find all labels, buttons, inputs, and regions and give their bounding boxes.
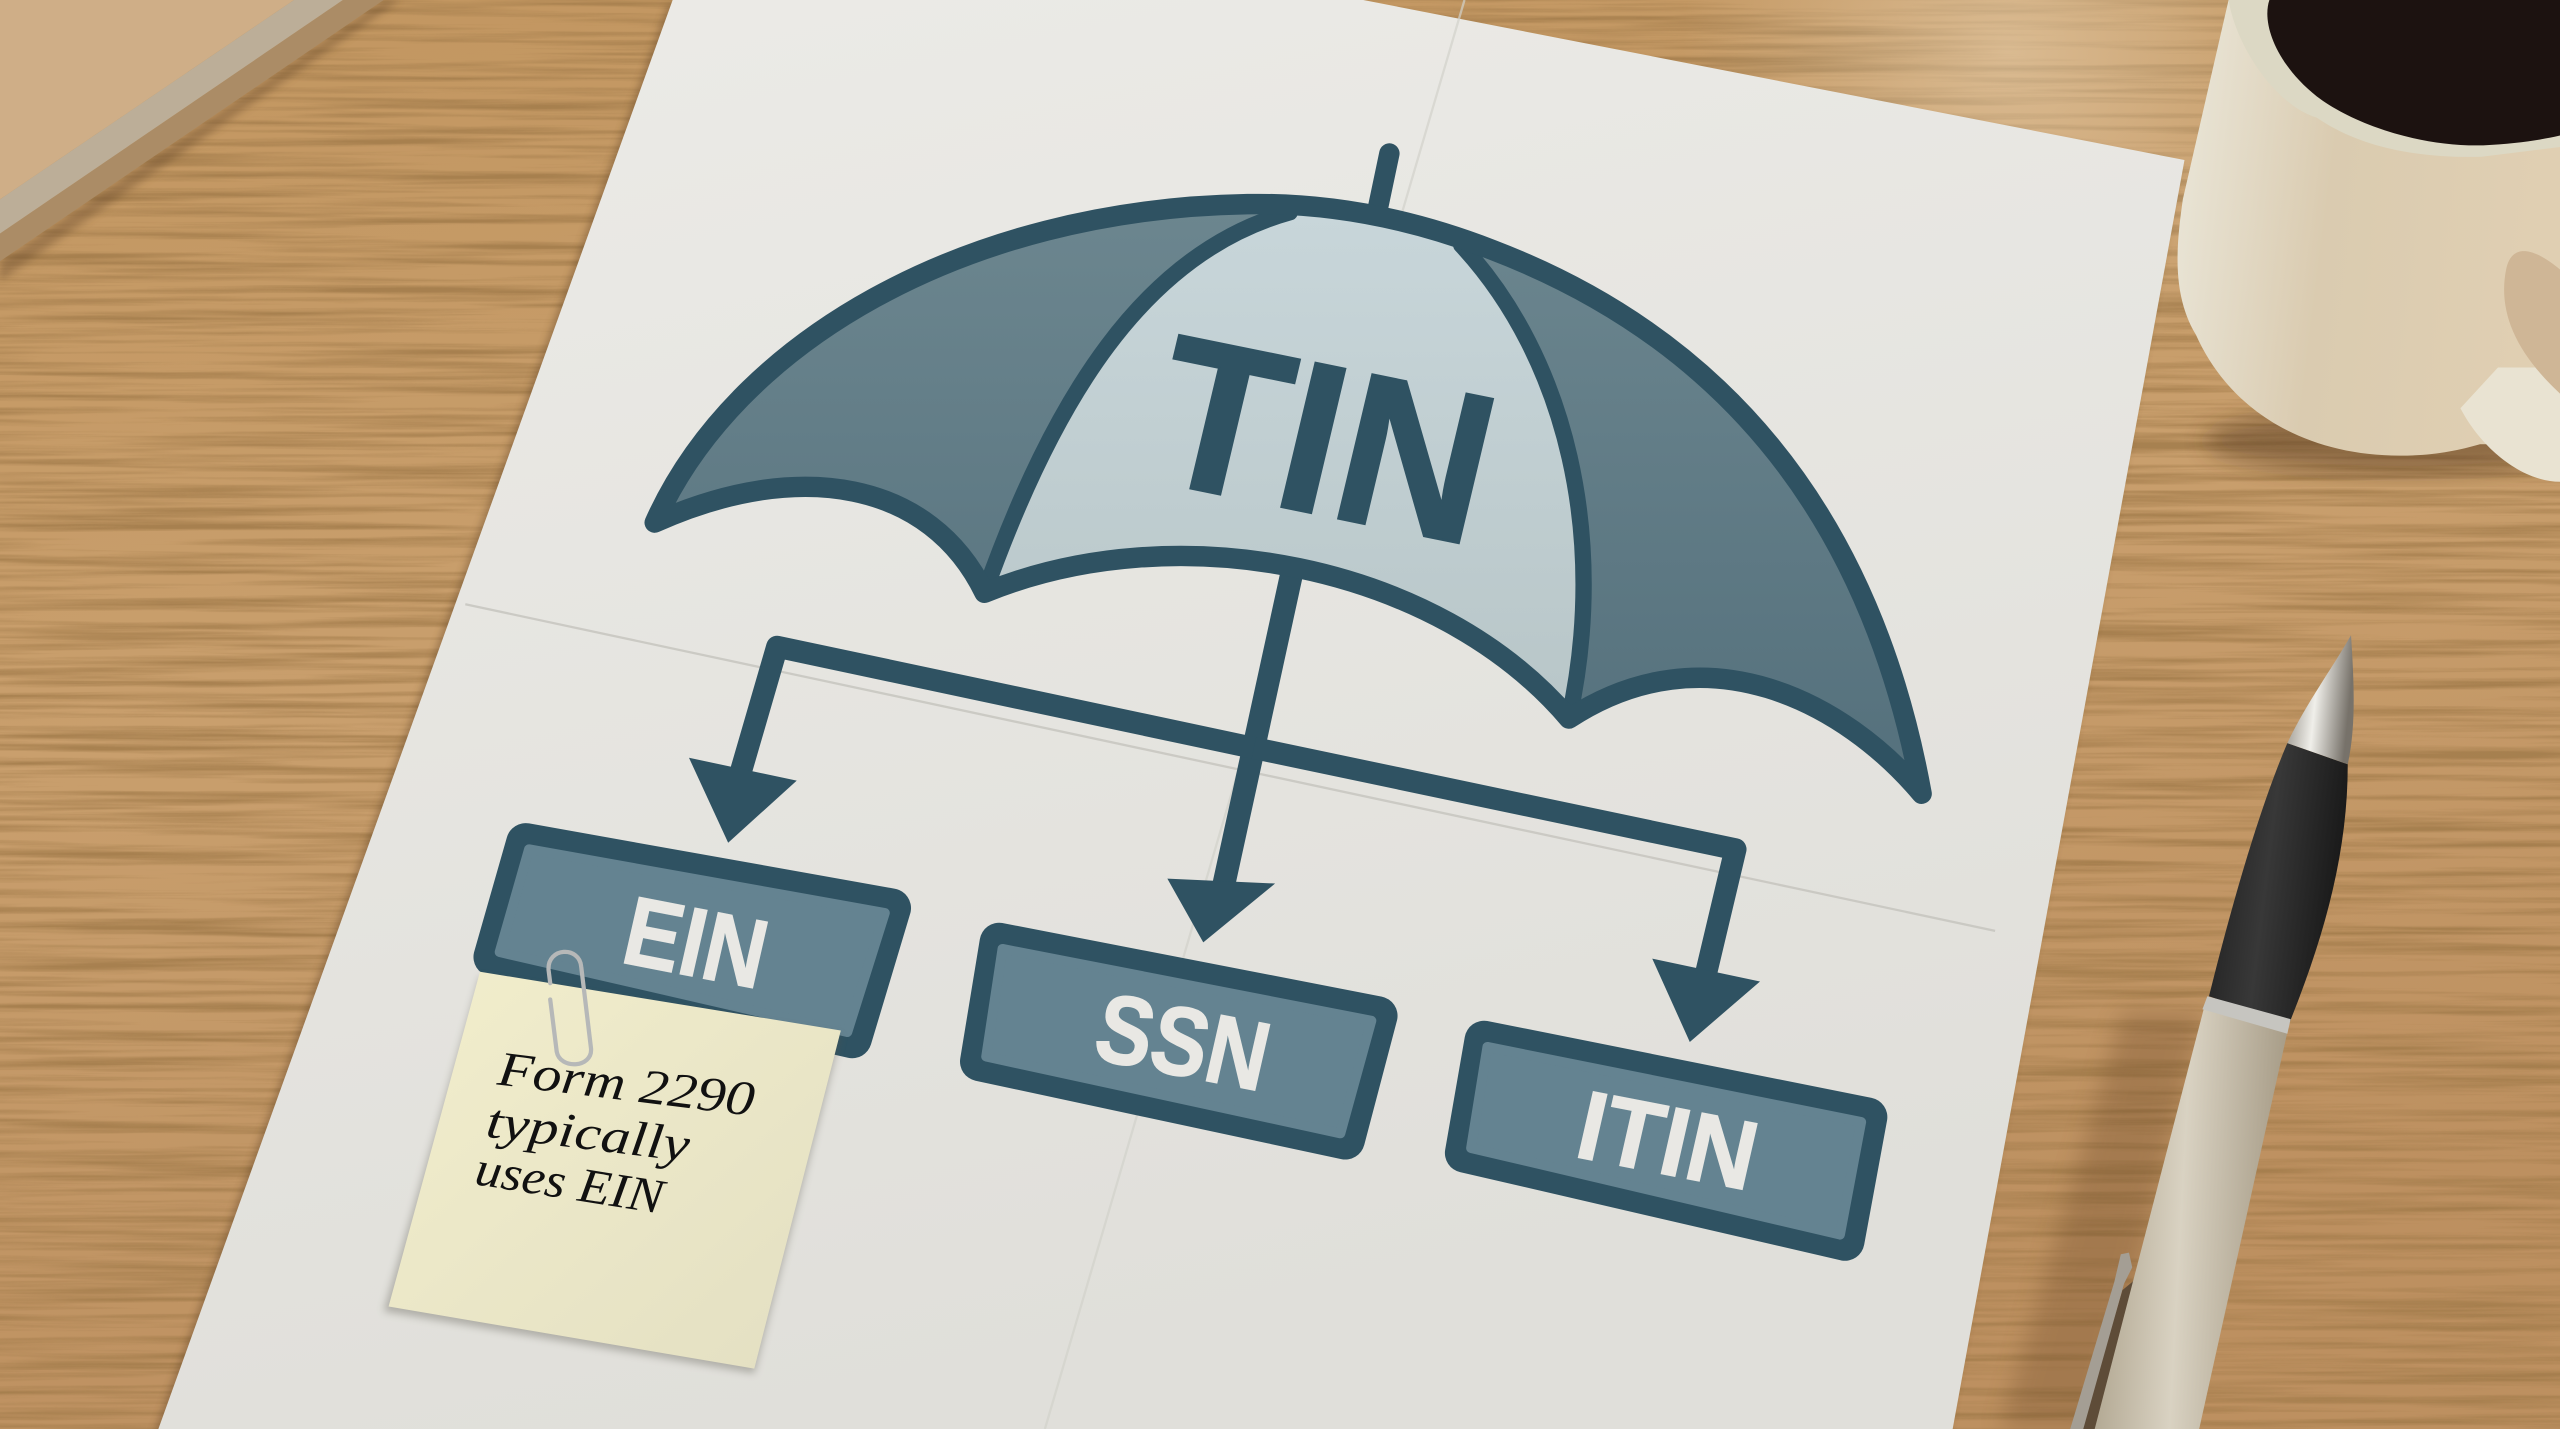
coffee mug xyxy=(2178,0,2560,482)
mug handle opening xyxy=(2504,251,2560,394)
arrow: centre shaft to SSN xyxy=(1167,575,1291,942)
mug rim xyxy=(2229,0,2560,157)
box: SSN xyxy=(980,942,1378,1140)
note text: uses EIN xyxy=(472,1141,670,1225)
pen clip xyxy=(2070,1253,2142,1429)
umbrella canopy side panels xyxy=(655,204,1922,794)
sticky note xyxy=(384,952,841,1373)
connector arrows from umbrella to boxes xyxy=(689,575,1760,1042)
umbrella with TIN label xyxy=(655,154,1922,794)
notebook in the top-left corner xyxy=(0,0,400,281)
note text xyxy=(472,1041,758,1225)
umbrella outline xyxy=(655,204,1922,794)
box: ITIN xyxy=(1464,1040,1868,1241)
arrow: branch to EIN xyxy=(689,647,1254,843)
pen xyxy=(2000,635,2354,1429)
note text: Form 2290 xyxy=(494,1041,758,1127)
mug body xyxy=(2178,0,2560,456)
label: ITIN: ITIN xyxy=(1568,1069,1768,1211)
umbrella centre panel xyxy=(984,207,1584,719)
pen tip xyxy=(2287,635,2354,764)
note text: typically xyxy=(484,1093,693,1173)
arrow: branch to ITIN xyxy=(1254,748,1760,1042)
mug handle lower loop xyxy=(2460,367,2560,482)
paper sheet xyxy=(153,0,2184,1429)
pen grip xyxy=(2209,743,2348,1024)
icon: paper clip xyxy=(549,952,591,1064)
pen ring xyxy=(2202,996,2291,1034)
umbrella top spike xyxy=(1376,154,1389,216)
box: EIN xyxy=(493,843,891,1039)
heading: TIN: TIN xyxy=(1132,289,1517,590)
umbrella ribs xyxy=(984,212,1584,719)
label: SSN: SSN xyxy=(1086,971,1280,1112)
label: EIN: EIN xyxy=(614,875,778,1010)
coffee xyxy=(2267,0,2560,145)
pen barrel xyxy=(2095,1008,2287,1429)
